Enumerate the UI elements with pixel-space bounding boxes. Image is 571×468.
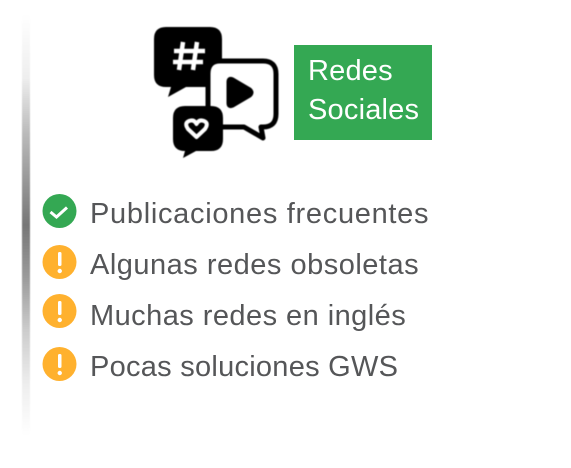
- list item: Algunas redes obsoletas: Algunas redes obsoletas: [90, 249, 419, 281]
- icon: hashtag bubble: [154, 27, 222, 97]
- decorative shaded vertical bar: [22, 15, 30, 435]
- list item: Muchas redes en inglés: Muchas redes en inglés: [90, 300, 406, 332]
- icon: video play bubble: [208, 61, 276, 138]
- list item: Pocas soluciones GWS: Pocas soluciones GWS: [90, 351, 398, 383]
- icon: heart bubble: [173, 106, 223, 158]
- icon: social media chat bubbles: [153, 26, 280, 158]
- heading: Redes Sociales: Redes: [308, 55, 393, 87]
- heading: Redes Sociales: Sociales: [308, 94, 419, 126]
- heading: Redes Sociales: [294, 45, 432, 140]
- list item: Publicaciones frecuentes: Publicaciones frecuentes: [90, 198, 429, 230]
